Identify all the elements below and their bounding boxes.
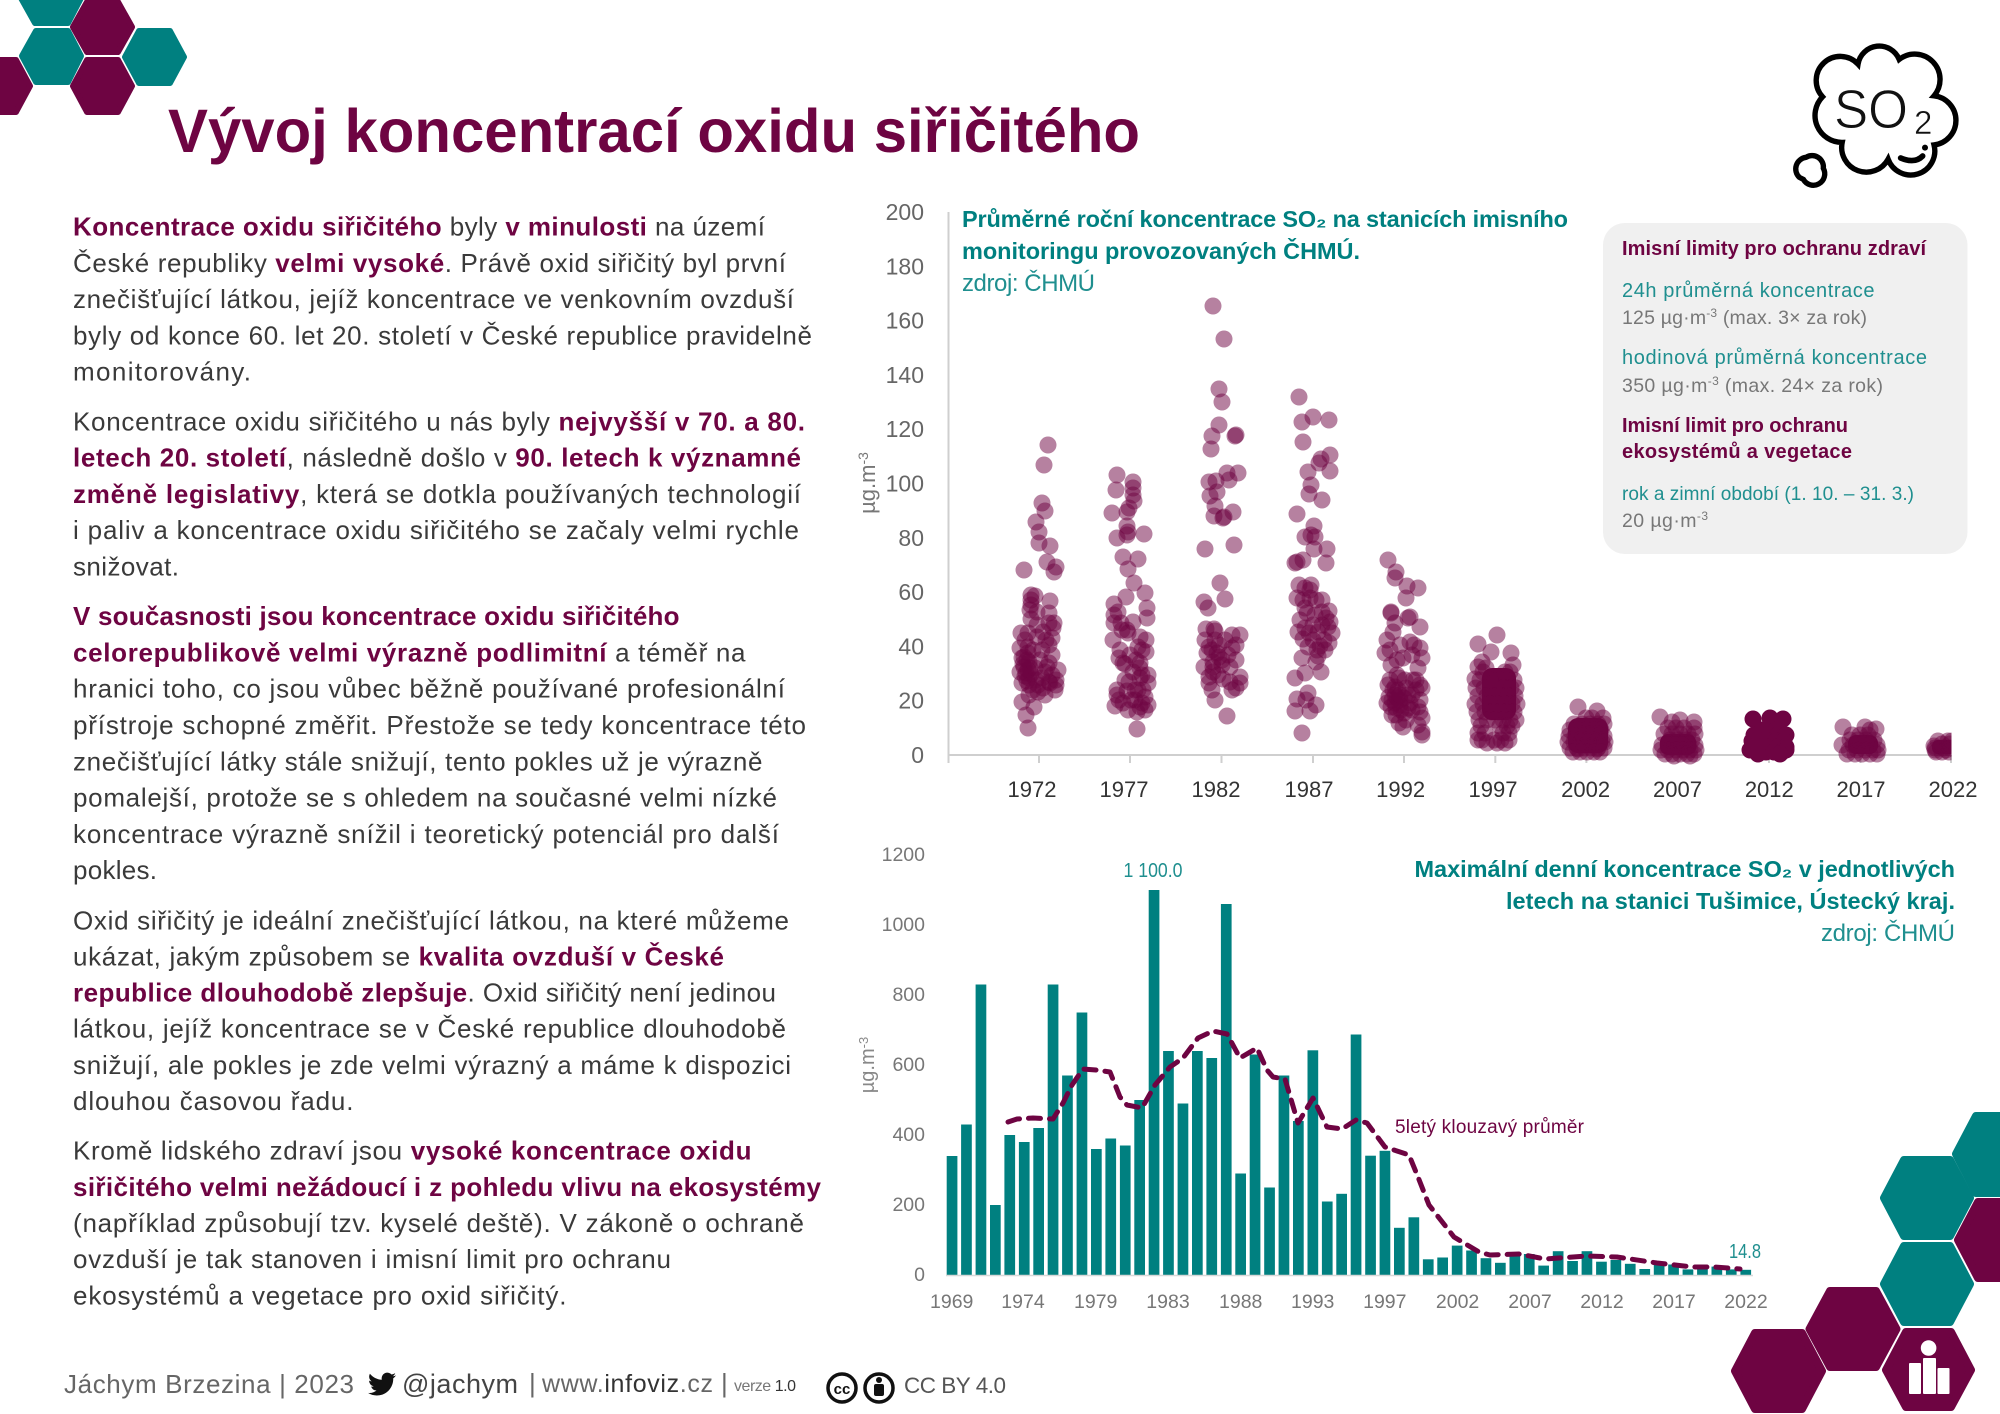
footer credits: | [721,1368,728,1398]
text block: ecosystems paragraph: siřičitého velmi nežádoucí i z pohledu vlivu na ekosystémy [73,1172,822,1202]
text block: ecosystems paragraph: ekosystémů a vegetace pro oxid siřičitý. [73,1280,566,1310]
points 1982 [1196,298,1248,724]
y axis labels: 1200 [882,844,925,866]
y axis labels: 0 [911,742,924,768]
y axis labels [882,844,925,1286]
chart title: letech na stanici Tušimice, Ústecký kraj. [1506,887,1955,914]
y axis unit: µg.m [855,465,880,514]
points 2012 [1742,710,1794,762]
chart title: zdroj: ČHMÚ [1821,919,1955,947]
x axis labels [930,1291,1768,1313]
x axis labels: 1988 [1219,1291,1262,1313]
icon: creative commons: cc [834,1381,850,1398]
text block: current situation paragraph: koncentrace výrazně snížil i teoretický potenciál pro další [73,819,780,849]
text block: current situation paragraph: znečišťující látky stále snižují, tento pokles už je výrazně [73,746,762,776]
data points [1012,298,1960,764]
chart title: zdroj: ČHMÚ [962,269,1095,297]
y axis labels [886,199,924,768]
icon: hexagons bottom right with chart symbol [1735,1116,2000,1409]
y axis labels: 140 [886,362,924,388]
text block: current situation paragraph: pokles. [73,855,157,885]
y axis labels: 60 [898,579,924,605]
icon: creative commons [828,1374,893,1402]
x axis labels: 2022 [1929,777,1977,802]
value labels: 1 100.0 [1124,860,1182,882]
text block: ecosystems paragraph [73,1136,822,1310]
chart title: Průměrné roční koncentrace SO₂ na stanicích imisního [962,206,1568,232]
y axis labels: 40 [898,633,924,659]
text block: intro paragraph: České republiky velmi vysoké. Právě oxid siřičitý byl první [73,248,787,278]
text block: ideal pollutant paragraph: dlouhou časovou řadu. [73,1086,354,1116]
text block: intro paragraph: byly od konce 60. let 20. století v České republice pravidelně [73,320,812,350]
panel: emission limits: 125 µg·m [1622,307,1706,329]
title: Vývoj koncentrací oxidu siřičitého [168,97,1140,165]
text block: ecosystems paragraph: (například způsobují tzv. kyselé deště). V zákoně o ochraně [73,1208,804,1238]
panel: emission limits: -3 [1706,306,1717,320]
text block: paragraph on 70s and 80s [73,406,805,582]
footer credits: verze 1.0 [734,1378,796,1395]
panel: emission limits: (max. 3× za rok) [1717,307,1867,329]
y axis labels: 200 [886,199,924,225]
footer credits [64,1368,1006,1402]
panel: emission limits: 24h průměrná koncentrace [1622,280,1874,302]
footer credits: | [529,1368,536,1398]
text block: ideal pollutant paragraph: Oxid siřičitý je ideální znečišťující látkou, na které můžeme [73,905,789,935]
x axis labels: 1979 [1074,1291,1117,1313]
icon: SO2 cloud: 2 [1914,104,1932,141]
chart: annual mean concentrations scatter [855,199,1977,802]
panel: emission limits: Imisní limit pro ochranu [1622,415,1848,437]
x axis labels: 2012 [1580,1291,1624,1313]
panel: emission limits: 20 µg·m [1622,510,1696,532]
chart title [1414,856,1955,947]
footer credits: CC BY 4.0 [904,1373,1006,1398]
text block: paragraph on 70s and 80s: Koncentrace oxidu siřičitého u nás byly nejvyšší v 70. a 80. [73,406,805,436]
text block: intro paragraph [73,212,812,386]
x axis labels: 2002 [1436,1291,1479,1313]
chart axes [948,212,1952,763]
points 2017 [1834,718,1886,762]
panel: emission limits: hodinová průměrná koncentrace [1622,347,1927,369]
footer credits: @jachym [402,1369,518,1399]
icon: twitter bird [368,1373,396,1395]
text block: ideal pollutant paragraph: látkou, jejíž koncentrace se v České republice dlouhodobě [73,1014,786,1044]
text block: paragraph on 70s and 80s: změně legislativy, která se dotkla používaných technologií [73,479,802,509]
x axis labels [1008,777,1977,802]
chart title [962,206,1568,297]
x axis labels: 1992 [1376,777,1425,802]
panel: emission limits: -3 [1697,509,1708,523]
icon: hexagons top left [0,0,184,112]
text block: current situation paragraph: celorepublikově velmi výrazně podlimitní a téměř na [73,638,746,668]
points 1972 [1012,436,1066,736]
x axis labels: 2012 [1745,777,1794,802]
moving average line [1008,1031,1740,1269]
value labels [1124,860,1761,1263]
footer credits: www.infoviz.cz [541,1370,713,1398]
chart title: Maximální denní koncentrace SO₂ v jednotlivých [1414,856,1955,882]
y axis unit: µg.m [857,1048,879,1093]
points 1987 [1286,388,1340,742]
x axis labels: 1997 [1469,777,1517,802]
y axis labels: 0 [914,1264,925,1286]
text block: ideal pollutant paragraph [73,905,791,1116]
x axis labels: 1983 [1146,1291,1190,1313]
x axis labels: 1972 [1008,777,1056,802]
chart title: monitoringu provozovaných ČHMÚ. [962,237,1360,264]
text block: current situation paragraph: přístroje schopné změřit. Přestože se tedy koncentrace této [73,710,806,740]
x axis labels: 1974 [1001,1291,1045,1313]
y axis unit: -3 [856,1037,871,1048]
y axis labels: 180 [886,253,924,279]
value labels: 14.8 [1729,1241,1761,1263]
y axis labels: 120 [886,416,924,442]
y axis labels: 100 [886,470,924,496]
x axis labels: 1969 [930,1291,973,1313]
y axis labels: 800 [892,984,925,1006]
text block: intro paragraph: monitorovány. [73,356,251,386]
x axis labels: 1982 [1192,777,1240,802]
text block: paragraph on 70s and 80s: snižovat. [73,552,179,582]
panel: emission limits [1603,223,1968,554]
y axis labels: 80 [898,525,924,551]
text block: current situation paragraph: pomalejší, protože se s ohledem na současné velmi nízké [73,783,777,813]
points 2002 [1560,698,1614,760]
text block: current situation paragraph: hranici toho, co jsou vůbec běžně používané profesionální [73,674,786,704]
x axis labels: 2022 [1724,1291,1768,1313]
x axis labels: 2007 [1653,777,1702,802]
points 1997 [1466,626,1526,752]
panel: emission limits: Imisní limity pro ochranu zdraví [1622,238,1927,260]
text block: ideal pollutant paragraph: republice dlouhodobě zlepšuje. Oxid siřičitý není jedinou [73,978,776,1008]
panel: emission limits: rok a zimní období (1. 10. – 31. 3.) [1622,484,1914,505]
x axis labels: 2017 [1837,777,1885,802]
panel: emission limits: (max. 24× za rok) [1719,375,1883,397]
text block: ideal pollutant paragraph: ukázat, jakým způsobem se kvalita ovzduší v České [73,942,724,972]
text block: ecosystems paragraph: Kromě lidského zdraví jsou vysoké koncentrace oxidu [73,1136,752,1166]
x axis labels: 1997 [1363,1291,1406,1313]
y axis labels: 20 [898,688,924,714]
points 1977 [1104,466,1156,738]
x axis labels: 1977 [1100,777,1148,802]
y axis labels: 1000 [882,914,925,936]
y axis labels: 600 [892,1054,925,1076]
text block: current situation paragraph [73,601,806,885]
bars [947,890,1751,1275]
y axis unit: -3 [855,452,871,465]
points 2007 [1652,708,1704,764]
x axis labels: 1993 [1291,1291,1334,1313]
points 1992 [1376,552,1430,744]
y axis labels: 200 [892,1194,925,1216]
footer credits: Jáchym Brzezina | 2023 [64,1369,354,1399]
moving average label: 5letý klouzavý průměr [1395,1117,1585,1138]
chart: daily maximum at Tušimice [856,844,1955,1313]
text block: paragraph on 70s and 80s: letech 20. století, následně došlo v 90. letech k významné [73,443,801,473]
text block: ecosystems paragraph: ovzduší je tak stanoven i imisní limit pro ochranu [73,1244,671,1274]
text block: current situation paragraph: V současnosti jsou koncentrace oxidu siřičitého [73,601,680,631]
text block: intro paragraph: znečišťující látkou, jejíž koncentrace ve venkovním ovzduší [73,284,795,314]
x axis labels: 2007 [1508,1291,1552,1313]
icon: SO2 cloud: SO [1834,78,1908,140]
baseline [946,1274,1753,1276]
x axis labels: 2002 [1561,777,1610,802]
panel: emission limits: ekosystémů a vegetace [1622,441,1852,463]
y axis labels: 400 [892,1124,925,1146]
panel: emission limits: -3 [1708,374,1719,388]
x axis labels: 1987 [1285,777,1333,802]
text block: intro paragraph: Koncentrace oxidu siřičitého byly v minulosti na území [73,212,766,242]
y axis labels: 160 [886,308,924,334]
text block: ideal pollutant paragraph: snižují, ale pokles je zde velmi výrazný a máme k dispozici [73,1050,791,1080]
points 2022 [1926,732,1952,760]
icon: SO2 cloud [1796,46,1956,185]
panel: emission limits: 350 µg·m [1622,375,1707,397]
x axis labels: 2017 [1652,1291,1696,1313]
text block: paragraph on 70s and 80s: i paliv a koncentrace oxidu siřičitého se začaly velmi rychle [73,515,799,545]
